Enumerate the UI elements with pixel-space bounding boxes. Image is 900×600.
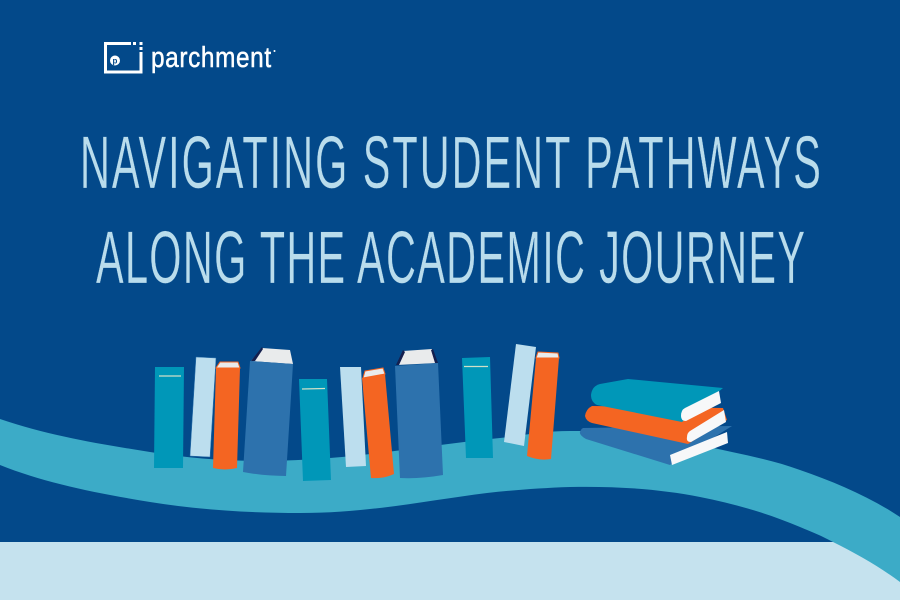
title line 2: ALONG THE ACADEMIC JOURNEY bbox=[96, 216, 805, 299]
stacked book: orange bbox=[585, 406, 727, 444]
logo icon bbox=[106, 42, 142, 72]
book: orange 3 bbox=[527, 352, 559, 460]
book: teal 3 bbox=[462, 357, 493, 458]
trademark dot bbox=[274, 50, 276, 52]
book: blue 1 bbox=[243, 347, 293, 476]
book row bbox=[154, 344, 559, 481]
title bbox=[80, 121, 821, 299]
book: orange 2 bbox=[362, 368, 394, 478]
stacked book: teal bbox=[591, 379, 723, 422]
book: teal 2 bbox=[299, 379, 331, 481]
bottom panel bbox=[0, 542, 900, 600]
wave ribbon bbox=[0, 419, 900, 582]
book stack bbox=[580, 379, 732, 465]
book: teal 1 bbox=[154, 367, 184, 468]
logo icon: p bbox=[113, 56, 118, 66]
book: light 2 bbox=[340, 367, 366, 467]
logo wordmark: parchment bbox=[151, 41, 272, 73]
book: light 1 bbox=[190, 357, 216, 457]
stacked book: blue bbox=[580, 426, 732, 465]
logo bbox=[106, 41, 276, 73]
book: orange 1 bbox=[213, 362, 240, 470]
book: blue 2 bbox=[395, 349, 443, 478]
book: light 3 bbox=[504, 344, 536, 446]
title line 1: NAVIGATING STUDENT PATHWAYS bbox=[80, 121, 821, 204]
